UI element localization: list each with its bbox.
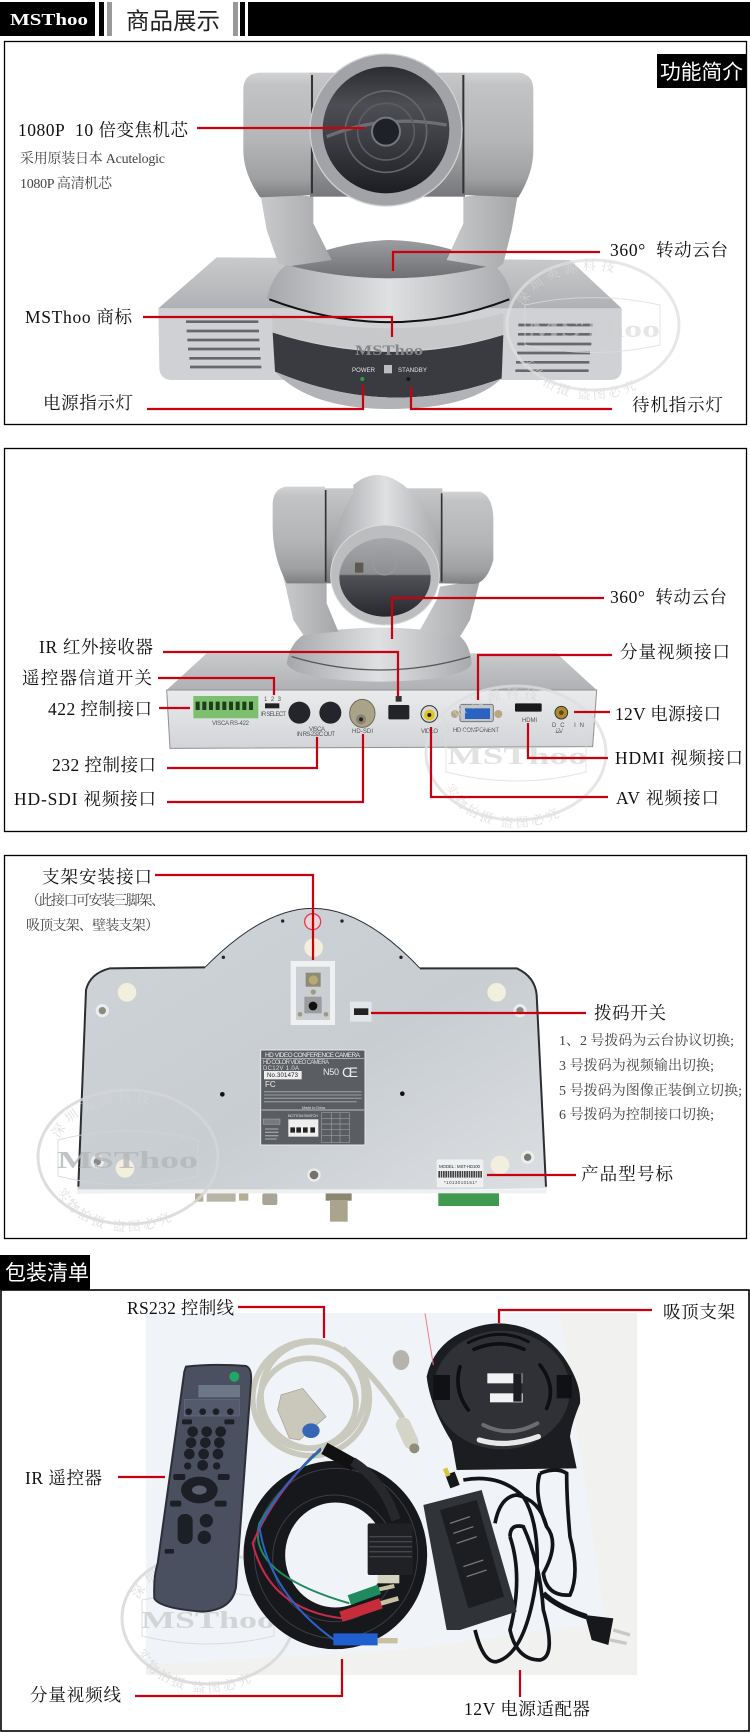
ports caption: 12V: 12V [555, 729, 563, 735]
text: mounting note [26, 892, 165, 934]
photo: accessories, left [154, 1341, 419, 1641]
callout: AV 视频接口: AV 视频接口 [616, 788, 719, 808]
callout: IR 遥控器 [25, 1468, 165, 1488]
panel border [1, 1290, 749, 1731]
watermark stamp [120, 1555, 292, 1693]
callout: 分量视频线 [30, 1659, 342, 1705]
header bar [0, 2, 750, 36]
watermark stamp [506, 258, 680, 400]
text: sensor description [20, 150, 165, 192]
watermark stamp: 深圳英源科技 [131, 1570, 154, 1598]
callout: 232 控制接口 [52, 737, 317, 775]
callout: 分量视频接口: 分量视频接口 [620, 642, 730, 662]
heading: 商品展示: 商品展示 [126, 8, 220, 34]
icon: remote control [154, 1365, 251, 1612]
rating label serial: No.301473 [267, 1073, 299, 1079]
callout: 分量视频线: 分量视频线 [30, 1685, 122, 1705]
panel: package contents [0, 1289, 750, 1732]
ports caption: VISCA RS-422: VISCA RS-422 [212, 721, 250, 727]
icon: DC barrel plug [450, 1473, 455, 1487]
callout: IR 红外接收器: IR 红外接收器 [39, 637, 154, 657]
callout: MSThoo 商标: MSThoo 商标 [25, 307, 132, 327]
watermark stamp: MSThoo [447, 744, 587, 770]
standby label on camera: STANDBY [398, 368, 427, 374]
rating label Made in China: Made in China [302, 1105, 326, 1110]
photo: camera underside plate [77, 908, 547, 1222]
icon: power adapter [423, 1490, 517, 1630]
text: mounting note: 吸顶支架、壁装支架） [26, 917, 159, 934]
callout: IR 红外接收器 [39, 637, 398, 697]
icon: component video cable [253, 1448, 418, 1641]
callout: 422 控制接口: 422 控制接口 [48, 699, 152, 719]
ports caption: VIDEO: VIDEO [421, 729, 438, 735]
callout: RS232 控制线: RS232 控制线 [127, 1298, 234, 1318]
watermark stamp: MSThoo [527, 317, 660, 343]
ports caption: switch numbers: 1 2 3 [264, 697, 282, 703]
text: DIP switch notes: 3 号拨码为视频输出切换; [559, 1057, 714, 1074]
photo background [146, 1313, 637, 1675]
watermark stamp: MSThoo [57, 1148, 198, 1174]
callout: 12V 电源适配器 [464, 1670, 590, 1719]
watermark stamp: 深圳英源科技 [50, 1092, 149, 1138]
watermark stamp [36, 1088, 220, 1232]
ports caption: IR SELECT: IR SELECT [261, 712, 286, 718]
power label on camera: POWER [352, 368, 376, 374]
callout: AV 视频接口 [431, 727, 719, 808]
callout: 吸顶支架 [499, 1302, 735, 1323]
text: DIP switch notes: 1、2 号拨码为云台协议切换; [559, 1032, 734, 1049]
text: DIP switch notes [559, 1032, 742, 1123]
panel: rear view of camera [4, 448, 748, 832]
callout: HDMI 视频接口: HDMI 视频接口 [615, 748, 743, 768]
rating label FC: FC [265, 1080, 276, 1089]
model sticker serial: *1013010151* [444, 1180, 477, 1185]
callout: 遥控器信道开关: 遥控器信道开关 [22, 668, 152, 688]
heading: 包装清单 [0, 1255, 90, 1290]
rating label title: HD VIDEO CONFERENCE CAMERA [265, 1052, 361, 1059]
icon: ceiling bracket [427, 1323, 580, 1470]
ports caption: DC IN: DC IN [552, 723, 584, 729]
ports caption: IN RS-232C OUT: IN RS-232C OUT [297, 732, 335, 738]
logo: MSThoo: MSThoo [10, 10, 88, 29]
icon: screws [393, 1350, 409, 1370]
panel border [4, 856, 746, 1238]
rating label mark CE: CE [342, 1064, 358, 1080]
text: DIP switch notes: 5 号拨码为图像正装倒立切换; [559, 1082, 742, 1099]
panel border [4, 448, 746, 832]
model sticker text: MODEL : MST-HD100 [439, 1164, 480, 1169]
callout: HD-SDI 视频接口 [14, 734, 363, 809]
photo: camera front [158, 54, 622, 409]
photo: camera rear with ports [167, 475, 597, 748]
callout: RS232 控制线 [127, 1298, 324, 1338]
icon: wall plug [585, 1615, 630, 1645]
callout: 232 控制接口: 232 控制接口 [52, 755, 156, 775]
watermark stamp: 深圳英源科技 [516, 262, 614, 305]
callout: 360 转动云台: 360° 转动云台 [610, 587, 727, 607]
watermark stamp: 深圳英源科技 [444, 688, 538, 724]
callout: 1080P 10 倍变焦机芯: 1080P 10 倍变焦机芯 [18, 120, 190, 140]
icon: RS232 cable [253, 1341, 419, 1456]
icon: thin red thread [425, 1313, 433, 1365]
callout: IR 遥控器: IR 遥控器 [25, 1468, 102, 1488]
panel: bottom view of camera [4, 854, 748, 1240]
callout: 12V 电源适配器: 12V 电源适配器 [464, 1699, 590, 1719]
ports caption: VISCA: VISCA [309, 727, 325, 733]
callout: 分量视频接口 [478, 642, 730, 700]
rating label mark N50: N50 [323, 1067, 339, 1077]
panel: front view of camera [4, 40, 748, 426]
callout: 拨码开关: 拨码开关 [594, 1003, 666, 1023]
watermark stamp: 实物拍摄 盗图必究 [56, 1188, 172, 1232]
text: DIP switch notes: 6 号拨码为控制接口切换; [559, 1106, 714, 1123]
callout: 电源指示灯: 电源指示灯 [43, 393, 133, 413]
callout: 支架安装接口: 支架安装接口 [42, 867, 152, 887]
text: mounting note: （此接口可安装三脚架、 [26, 892, 165, 909]
watermark stamp: MSThoo [141, 1608, 275, 1634]
panel border [4, 42, 746, 424]
rating label line: HD COLOR VIDEO CAMERA [263, 1060, 329, 1066]
ports caption: HDMI: HDMI [522, 718, 537, 724]
ports caption: HD-SDI: HD-SDI [352, 729, 373, 735]
rating label power: DC12V 1.0A [263, 1066, 299, 1072]
callout: 产品型号标: 产品型号标 [581, 1164, 674, 1184]
callout: MSThoo 商标 [25, 307, 392, 337]
callout: 360 转动云台 [393, 240, 728, 271]
logo on camera: MSThoo [355, 343, 423, 359]
callout: 12V 电源接口: 12V 电源接口 [615, 704, 721, 724]
watermark stamp: 实物拍摄 盗图必究 [444, 784, 560, 828]
ports caption: HD COMPONENT: HD COMPONENT [453, 728, 499, 734]
heading: 包装清单: 包装清单 [5, 1262, 89, 1285]
icon: power cords [463, 1470, 587, 1662]
paper sheet [146, 1313, 605, 1665]
callout: 待机指示灯: 待机指示灯 [632, 395, 723, 415]
photo: accessories, right [423, 1313, 630, 1662]
callout: 待机指示灯 [411, 387, 723, 415]
watermark stamp [424, 684, 608, 828]
text: sensor description: 采用原装日本 Acutelogic [20, 150, 165, 167]
callout: 360 转动云台 [392, 587, 727, 639]
watermark stamp: 实物拍摄 盗图必究 [524, 361, 636, 400]
callout: 支架安装接口 [42, 867, 313, 960]
callout: 功能简介: 功能简介 [660, 61, 744, 84]
callout: HD-SDI 视频接口: HD-SDI 视频接口 [14, 789, 156, 809]
text: sensor description: 1080P 高清机芯 [20, 175, 113, 192]
callout: 360 转动云台: 360° 转动云台 [610, 240, 728, 260]
callout: 吸顶支架: 吸顶支架 [663, 1302, 735, 1322]
callout: HDMI 视频接口 [528, 723, 743, 768]
rating label bottom switch: BOTTOM SWITCH [288, 1113, 318, 1118]
callout: 电源指示灯 [43, 385, 363, 413]
watermark stamp: 实物拍摄 盗图必究 [138, 1649, 252, 1693]
callout: 功能简介 [657, 54, 747, 88]
icon: barrel tip [445, 1468, 448, 1476]
callout: 遥控器信道开关 [22, 668, 274, 695]
